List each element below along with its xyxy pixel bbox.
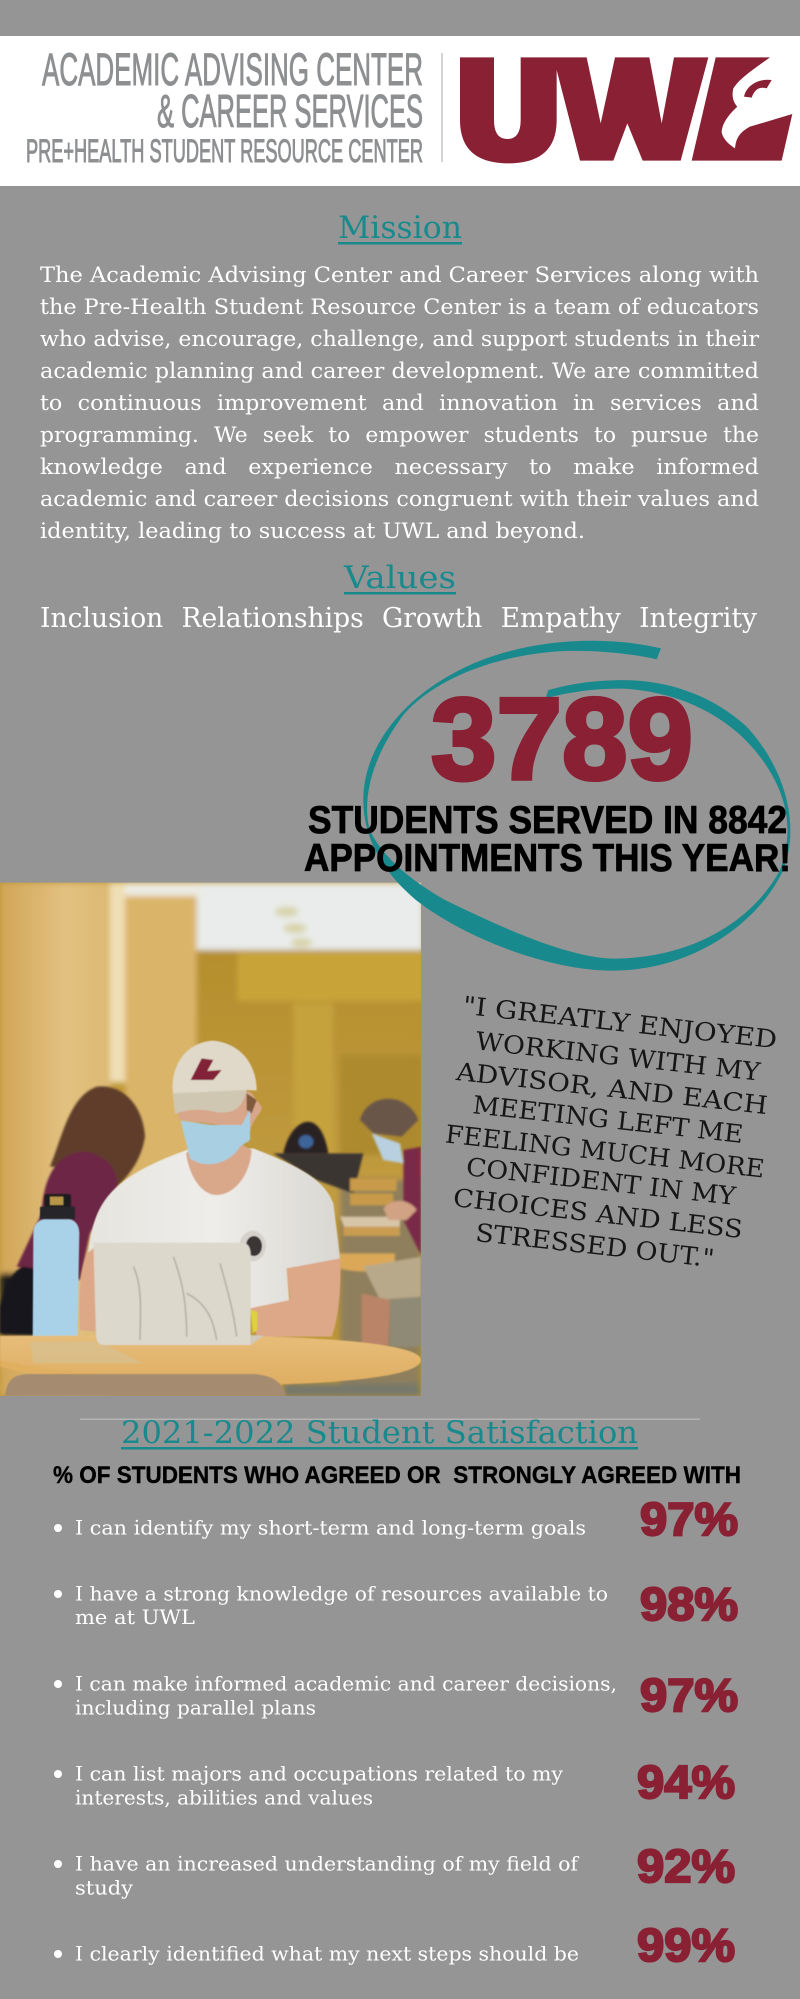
mission text: identity, leading to success at UWL and beyond.: [40, 519, 585, 544]
survey item 3: I can make informed academic and career decisions,: [75, 1672, 617, 1696]
survey item 6: 99%: [637, 1919, 735, 1971]
decorative ring around stat: [363, 641, 790, 971]
heading: Values: Values: [343, 560, 456, 596]
header logo band: [0, 36, 800, 186]
survey item 4: 94%: [637, 1756, 735, 1808]
shirt logo: [239, 1231, 266, 1261]
survey item 1: [54, 1493, 738, 1545]
mission text: academic and career decisions congruent with their values and: [40, 487, 759, 512]
survey item 3: 97%: [640, 1669, 738, 1721]
mission text: to continuous improvement and innovation in services and: [40, 391, 759, 416]
background students: [0, 1086, 421, 1347]
chair: [5, 1374, 286, 1396]
student quote: WORKING WITH MY: [474, 1026, 762, 1087]
mission text: academic planning and career development. We are committed: [40, 359, 759, 384]
department name: [26, 44, 423, 169]
survey item 2: me at UWL: [75, 1605, 195, 1629]
student quote: [444, 991, 779, 1273]
student quote: ADVISOR, AND EACH: [454, 1057, 769, 1120]
survey item 2: [54, 1578, 738, 1630]
mission text: the Pre-Health Student Resource Center is a team of educators: [40, 295, 759, 320]
table: [0, 1335, 421, 1385]
survey item 4: I can list majors and occupations related to my: [75, 1762, 564, 1786]
survey item 2: I have a strong knowledge of resources available to: [75, 1582, 608, 1606]
survey item 3: including parallel plans: [75, 1696, 316, 1720]
mission text: knowledge and experience necessary to make informed: [40, 455, 759, 480]
cap: [173, 1041, 257, 1113]
values list: Inclusion Relationships Growth Empathy Integrity: [40, 603, 758, 634]
mission text: The Academic Advising Center and Career Services along with: [40, 263, 759, 288]
survey item 4: interests, abilities and values: [75, 1786, 373, 1810]
survey item 2: 98%: [640, 1578, 738, 1630]
survey item 5: 92%: [637, 1840, 735, 1892]
survey subheading: % OF STUDENTS WHO AGREED OR STRONGLY AGREED WITH: [53, 1462, 741, 1489]
photo background: [0, 883, 424, 1397]
heading: student satisfaction: 2021-2022 Student Satisfaction: [121, 1415, 638, 1451]
student quote: CHOICES AND LESS: [452, 1183, 744, 1244]
survey item 3: [54, 1669, 738, 1721]
student quote: STRESSED OUT.": [474, 1218, 716, 1273]
student figure: [0, 1041, 421, 1396]
laptop: [93, 1243, 263, 1345]
survey item 5: [54, 1840, 735, 1900]
survey item 1: I can identify my short-term and long-term goals: [75, 1516, 586, 1540]
water bottle: [33, 1194, 79, 1342]
survey item 5: study: [75, 1876, 134, 1900]
stat: students served: 3789: [431, 674, 693, 804]
department name: & CAREER SERVICES: [157, 85, 423, 137]
survey item 6: [54, 1919, 735, 1971]
student quote: CONFIDENT IN MY: [465, 1152, 738, 1211]
student quote: "I GREATLY ENJOYED: [461, 991, 779, 1054]
arm: [250, 1258, 340, 1337]
mission text: [40, 263, 760, 544]
heading: Mission: Mission: [338, 210, 462, 246]
shirt: [88, 1148, 340, 1313]
mission text: programming. We seek to empower students to pursue the: [40, 423, 759, 448]
student quote: FEELING MUCH MORE: [444, 1120, 766, 1184]
student quote: MEETING LEFT ME: [471, 1090, 745, 1149]
survey item 6: I clearly identified what my next steps should be: [75, 1942, 579, 1966]
survey item 5: I have an increased understanding of my field of: [75, 1852, 580, 1876]
department name: ACADEMIC ADVISING CENTER: [42, 44, 423, 95]
mission text: who advise, encourage, challenge, and support students in their: [40, 327, 760, 352]
department name: PRE+HEALTH STUDENT RESOURCE CENTER: [26, 133, 423, 169]
photo: student at laptop: [0, 883, 424, 1397]
head: [177, 1091, 262, 1143]
survey item 4: [54, 1756, 735, 1810]
stat: students served: [304, 674, 791, 880]
icon: UWL logo: [460, 57, 792, 163]
survey item 1: 97%: [640, 1493, 738, 1545]
